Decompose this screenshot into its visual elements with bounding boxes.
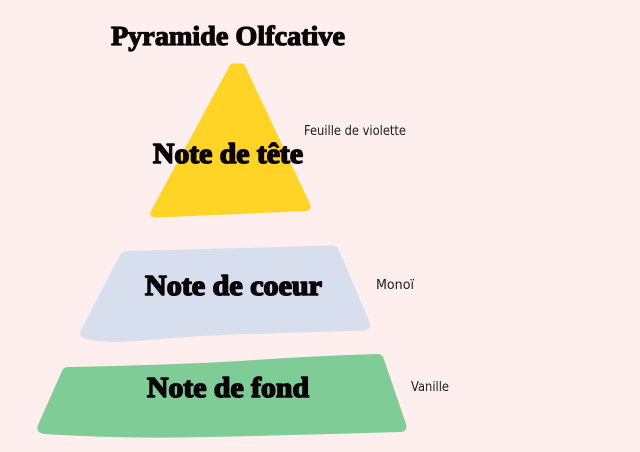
label: note de coeur: Note de coeur: [145, 270, 322, 302]
shape: green trapezoid: [37, 354, 406, 438]
ingredient: monoi: Monoï: [376, 278, 414, 293]
pyramid tier: top note: [150, 64, 310, 218]
ingredient: vanille: Vanille: [411, 380, 449, 395]
label: note de tete: Note de tête: [153, 138, 303, 170]
shape: blue trapezoid: [80, 246, 370, 342]
shape: yellow triangle: [150, 64, 310, 218]
label: note de fond: Note de fond: [147, 372, 309, 404]
pyramid tier: heart note: [80, 246, 370, 342]
ingredient: feuille de violette: Feuille de violette: [304, 124, 406, 139]
pyramid tier: base note: [37, 354, 406, 438]
title: Pyramide Olfcative: [111, 21, 345, 51]
